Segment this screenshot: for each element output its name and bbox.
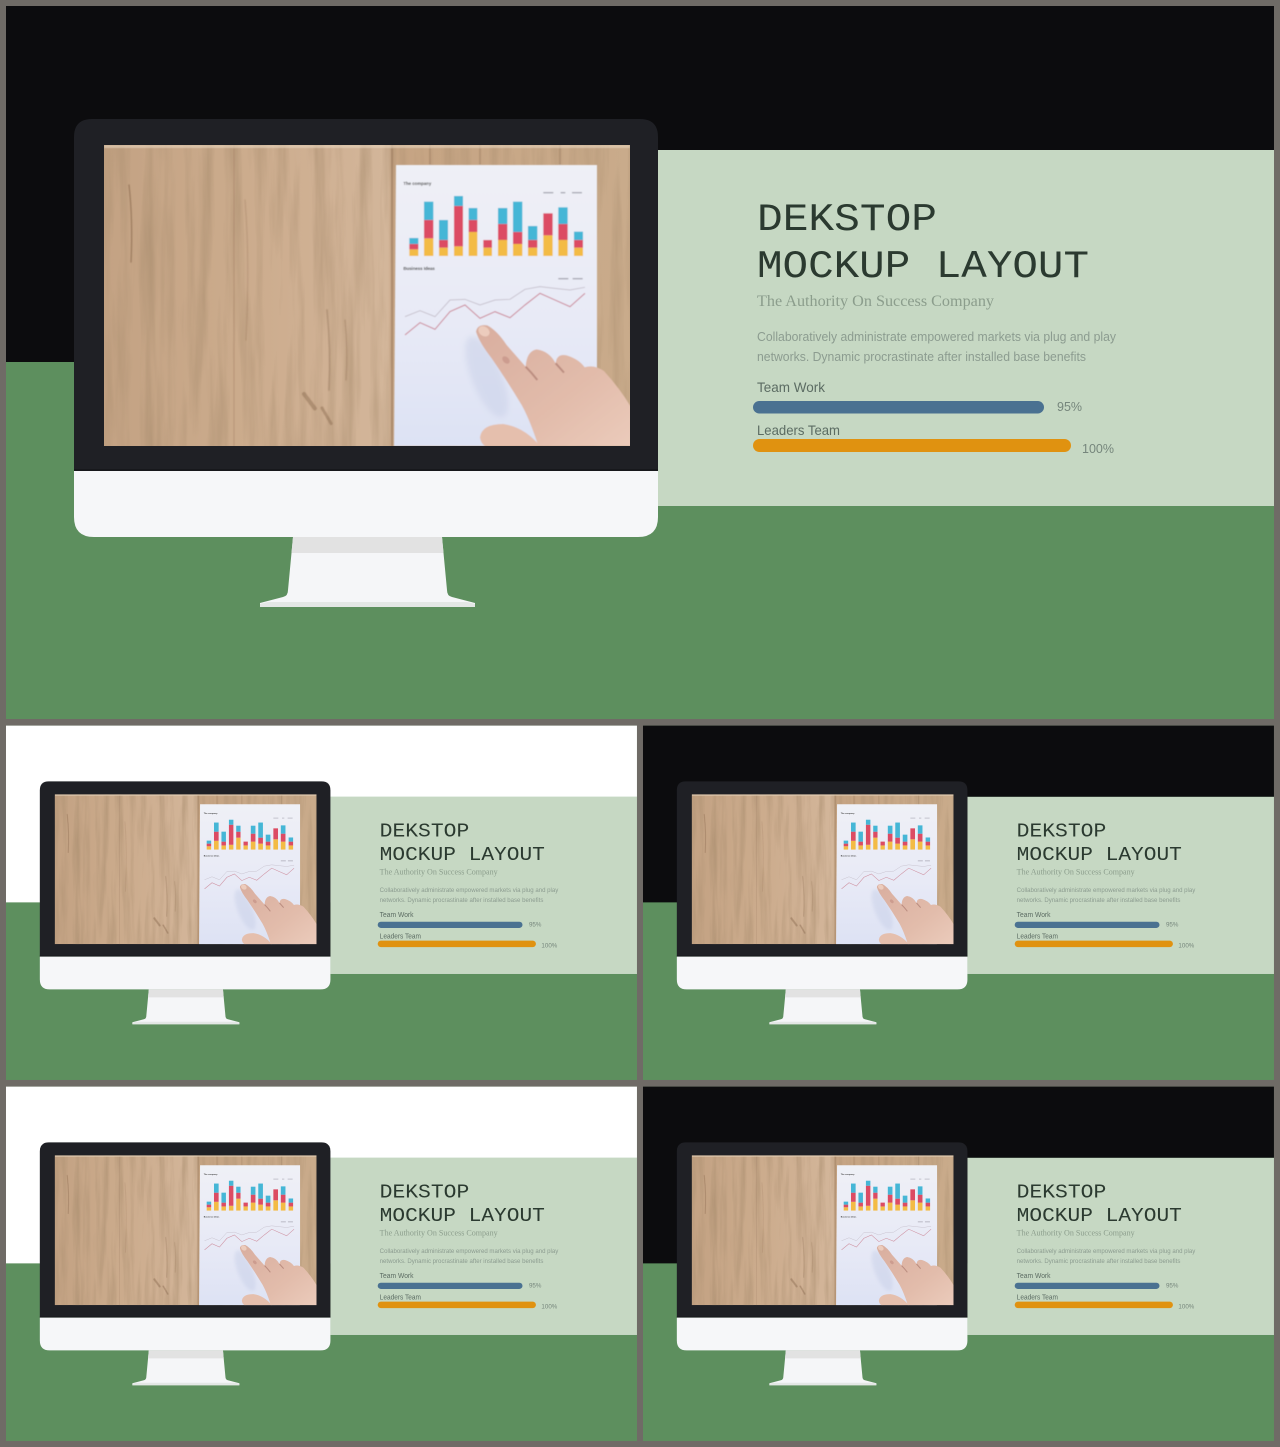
- progress bar: Team Work 95%: 95%: [1166, 922, 1179, 929]
- body text: [757, 330, 1117, 364]
- body text: Collaboratively administrate empowered markets via plug and play: [380, 1248, 559, 1255]
- title: MOCKUP LAYOUT: [1017, 1205, 1182, 1227]
- panel: black slide top right: [643, 726, 1274, 1080]
- progress bar: Leaders Team 100%: Leaders Team: [1017, 1295, 1058, 1302]
- subtitle: The Authority On Success Company: [1017, 1228, 1135, 1237]
- panel: text card: [330, 797, 637, 974]
- title: DEKSTOP: [380, 1182, 469, 1204]
- progress bar: Leaders Team 100%: [378, 934, 558, 950]
- progress bar: Leaders Team 100%: [1015, 1295, 1195, 1311]
- title: DEKSTOP: [757, 198, 937, 242]
- title: [380, 821, 545, 866]
- panel: white slide bottom left: [6, 1087, 637, 1441]
- body text: networks. Dynamic procrastinate after installed base benefits: [1017, 1258, 1180, 1265]
- title: [1017, 821, 1182, 866]
- title: DEKSTOP: [1017, 1182, 1106, 1204]
- progress bar: Team Work 95%: [1015, 1273, 1179, 1290]
- body text: networks. Dynamic procrastinate after installed base benefits: [380, 1258, 543, 1265]
- progress bar: Team Work 95%: Team Work: [1017, 912, 1051, 919]
- title: DEKSTOP: [380, 821, 469, 843]
- progress bar: Team Work 95%: [378, 912, 542, 929]
- title: MOCKUP LAYOUT: [1017, 844, 1182, 866]
- progress bar: Team Work 95%: [753, 379, 1082, 414]
- icon: desktop monitor: [677, 781, 967, 1024]
- body text: networks. Dynamic procrastinate after installed base benefits: [757, 350, 1086, 364]
- body text: Collaboratively administrate empowered markets via plug and play: [380, 887, 559, 894]
- progress bar: Leaders Team 100%: 100%: [1082, 442, 1114, 456]
- progress bar: Leaders Team 100%: Leaders Team: [380, 934, 421, 941]
- icon: desktop monitor: [677, 1142, 967, 1385]
- progress bar: Leaders Team 100%: 100%: [1178, 1304, 1195, 1311]
- slide background: [6, 1087, 637, 1441]
- body text: Collaboratively administrate empowered markets via plug and play: [757, 330, 1117, 344]
- slide background: [6, 726, 637, 1080]
- icon: desktop monitor: [40, 1142, 330, 1385]
- progress bar: Leaders Team 100%: [378, 1295, 558, 1311]
- slide background: [643, 726, 1274, 1080]
- title: [380, 1182, 545, 1227]
- panel: text card: [967, 797, 1274, 974]
- body text: networks. Dynamic procrastinate after installed base benefits: [1017, 897, 1180, 904]
- icon: desktop monitor: [74, 119, 658, 607]
- progress bar: Team Work 95%: 95%: [1057, 400, 1082, 414]
- progress bar: Leaders Team 100%: 100%: [1178, 943, 1195, 950]
- progress bar: Team Work 95%: Team Work: [380, 912, 414, 919]
- progress bar: Leaders Team 100%: Leaders Team: [380, 1295, 421, 1302]
- subtitle: The Authority On Success Company: [380, 1228, 498, 1237]
- title: DEKSTOP: [1017, 821, 1106, 843]
- title: MOCKUP LAYOUT: [757, 245, 1089, 289]
- progress bar: Team Work 95%: Team Work: [1017, 1273, 1051, 1280]
- body text: Collaboratively administrate empowered markets via plug and play: [1017, 887, 1196, 894]
- subtitle: The Authority On Success Company: [1017, 867, 1135, 876]
- progress bar: Leaders Team 100%: Leaders Team: [757, 422, 840, 438]
- body text: networks. Dynamic procrastinate after installed base benefits: [380, 897, 543, 904]
- progress bar: Team Work 95%: [1015, 912, 1179, 929]
- subtitle: The Authority On Success Company: [757, 293, 994, 310]
- body text: [1017, 887, 1196, 904]
- title: MOCKUP LAYOUT: [380, 844, 545, 866]
- progress bar: Team Work 95%: 95%: [1166, 1283, 1179, 1290]
- progress bar: Leaders Team 100%: Leaders Team: [1017, 934, 1058, 941]
- body text: [380, 887, 559, 904]
- progress bar: Leaders Team 100%: [1015, 934, 1195, 950]
- progress bar: Team Work 95%: Team Work: [757, 379, 826, 395]
- panel: text card: [967, 1158, 1274, 1335]
- body text: [1017, 1248, 1196, 1265]
- body text: Collaboratively administrate empowered markets via plug and play: [1017, 1248, 1196, 1255]
- title: MOCKUP LAYOUT: [380, 1205, 545, 1227]
- progress bar: Leaders Team 100%: 100%: [541, 943, 558, 950]
- progress bar: Leaders Team 100%: [753, 422, 1114, 456]
- title: [757, 198, 1089, 289]
- slide background: [643, 1087, 1274, 1441]
- progress bar: Leaders Team 100%: 100%: [541, 1304, 558, 1311]
- progress bar: Team Work 95%: [378, 1273, 542, 1290]
- title: [1017, 1182, 1182, 1227]
- body text: [380, 1248, 559, 1265]
- subtitle: The Authority On Success Company: [380, 867, 498, 876]
- progress bar: Team Work 95%: 95%: [529, 1283, 542, 1290]
- panel: main slide: [6, 6, 1274, 719]
- panel: black slide bottom right: [643, 1087, 1274, 1441]
- icon: desktop monitor: [40, 781, 330, 1024]
- progress bar: Team Work 95%: 95%: [529, 922, 542, 929]
- progress bar: Team Work 95%: Team Work: [380, 1273, 414, 1280]
- slide background: [6, 6, 1274, 719]
- panel: text card: [330, 1158, 637, 1335]
- panel: white slide top left: [6, 726, 637, 1080]
- panel: text card: [658, 150, 1274, 506]
